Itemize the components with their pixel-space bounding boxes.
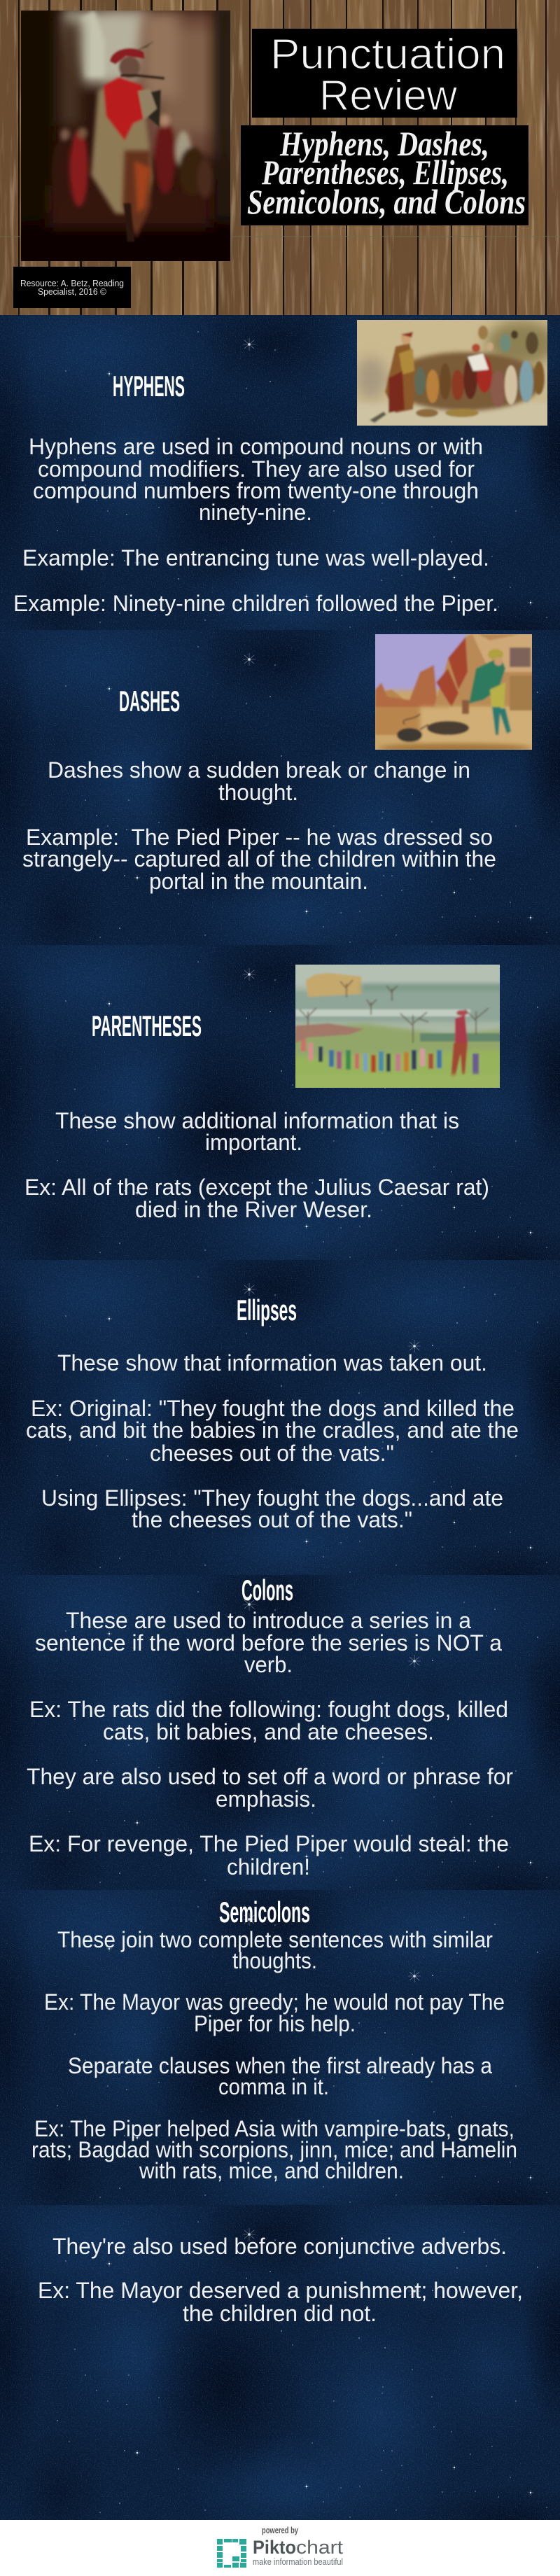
subtitle banner: Hyphens, Dashes,: [279, 124, 489, 163]
body text: parentheses: important.: [205, 1130, 302, 1155]
body text: parentheses: These show additional information that is: [55, 1108, 459, 1133]
body text: dashes: [22, 757, 496, 894]
body text: semicolons: Piper for his help.: [194, 2011, 356, 2036]
body text: colons: Ex: The rats did the following: fought dogs, killed: [29, 1697, 508, 1722]
heading: parentheses: PARENTHESES: [92, 1009, 202, 1042]
heading: colons: Colons: [241, 1574, 293, 1606]
body text: colons: emphasis.: [216, 1786, 316, 1812]
body text: colons: children!: [227, 1854, 310, 1879]
body text: hyphens: compound numbers from twenty-one through: [33, 478, 479, 503]
heading: semicolons: Semicolons: [219, 1896, 310, 1928]
panel: dashes: DASHES: [119, 685, 180, 718]
resource credit box: Specialist, 2016 ©: [38, 286, 106, 297]
body text: semicolons: rats; Bagdad with scorpions, jinn, mice; and Hamelin: [31, 2137, 517, 2162]
body text: ellipses: [26, 1350, 519, 1532]
panel: wood plank header background: [0, 0, 560, 315]
body text: hyphens: Hyphens are used in compound nouns or with: [29, 434, 483, 459]
body text: semicolons: comma in it.: [218, 2074, 329, 2099]
body text: parentheses: died in the River Weser.: [135, 1197, 372, 1222]
body text: ellipses: Using Ellipses: "They fought the dogs...and ate: [41, 1485, 503, 1511]
body text: dashes: Example: The Pied Piper -- he was dressed so: [26, 825, 493, 850]
icon: Piktochart logo: [217, 2539, 246, 2568]
body text: semicolons: They're also used before conjunctive adverbs.: [52, 2234, 507, 2259]
body text: hyphens: ninety-nine.: [199, 500, 312, 525]
title banner: Punctuation: [270, 30, 505, 78]
image: Pied Piper leading children down a street: [21, 10, 230, 261]
body text: semicolons: Ex: The Mayor deserved a punishment; however,: [38, 2278, 523, 2303]
body text: colons: sentence if the word before the series is NOT a: [35, 1630, 502, 1656]
body text: dashes: thought.: [218, 780, 298, 805]
body text: colons: These are used to introduce a series in a: [66, 1608, 471, 1633]
body text: ellipses: These show that information was taken out.: [57, 1350, 487, 1376]
panel: colons: [27, 1574, 513, 1879]
body text: dashes: portal in the mountain.: [149, 869, 368, 894]
footer: Piktochart attribution: [0, 2520, 560, 2576]
text: powered by: powered by: [262, 2525, 299, 2535]
body text: semicolons: [31, 1927, 523, 2326]
body text: hyphens: Example: The entrancing tune was well-played.: [22, 545, 489, 570]
body text: ellipses: cats, and bit the babies in the cradles, and ate the: [26, 1418, 519, 1443]
tagline: make information beautiful: [253, 2557, 343, 2567]
body text: colons: verb.: [244, 1652, 293, 1677]
body text: dashes: Dashes show a sudden break or change in: [48, 757, 470, 783]
body text: ellipses: cheeses out of the vats.": [150, 1441, 394, 1466]
title banner: [252, 29, 517, 119]
body text: semicolons: These join two complete sentences with similar: [57, 1927, 493, 1952]
body text: semicolons: thoughts.: [232, 1948, 317, 1973]
subtitle banner: [241, 124, 528, 225]
body text: ellipses: the cheeses out of the vats.": [132, 1507, 412, 1532]
panel: ellipses: [26, 1294, 519, 1532]
heading: ellipses: Ellipses: [237, 1294, 297, 1326]
body text: semicolons: Ex: The Mayor was greedy; he would not pay The: [44, 1989, 505, 2015]
body text: dashes: strangely-- captured all of the children within the: [22, 846, 496, 872]
body text: colons: Ex: For revenge, The Pied Piper would steal: the: [29, 1831, 509, 1856]
body text: hyphens: [13, 434, 498, 616]
body text: parentheses: [24, 1108, 489, 1222]
body text: parentheses: Ex: All of the rats (except the Julius Caesar rat): [24, 1175, 489, 1200]
body text: hyphens: compound modifiers. They are also used for: [38, 456, 475, 482]
body text: hyphens: Example: Ninety-nine children followed the Piper.: [13, 591, 498, 616]
body text: colons: [27, 1608, 513, 1879]
panel: hyphens: [13, 313, 556, 616]
heading: hyphens: HYPHENS: [113, 370, 185, 402]
logotype: Piktochart: [253, 2537, 344, 2558]
title banner: Review: [319, 71, 458, 119]
body text: ellipses: Ex: Original: "They fought the dogs and killed the: [31, 1396, 514, 1421]
logotype: Piktochart: chart: [296, 2537, 344, 2558]
logotype: Piktochart: Pikto: [253, 2537, 296, 2558]
image: piper walking past rats in town: [375, 634, 532, 750]
body text: semicolons: the children did not.: [183, 2301, 377, 2326]
panel: dashes: [22, 627, 539, 894]
body text: semicolons: with rats, mice, and children.: [139, 2158, 404, 2183]
resource credit box: Resource: A. Betz, Reading: [20, 278, 124, 288]
image: piper and crowd of children: [357, 320, 547, 426]
resource credit box: [13, 267, 131, 308]
body text: semicolons: Separate clauses when the first already has a: [68, 2053, 492, 2078]
panel: parentheses: [24, 958, 507, 1222]
body text: colons: cats, bit babies, and ate cheeses.: [103, 1719, 434, 1744]
body text: colons: They are also used to set off a word or phrase for: [27, 1764, 513, 1789]
image: children following piper through a green valley: [295, 965, 500, 1088]
body text: semicolons: Ex: The Piper helped Asia with vampire-bats, gnats,: [34, 2116, 514, 2141]
panel: semicolons: [31, 1896, 523, 2326]
